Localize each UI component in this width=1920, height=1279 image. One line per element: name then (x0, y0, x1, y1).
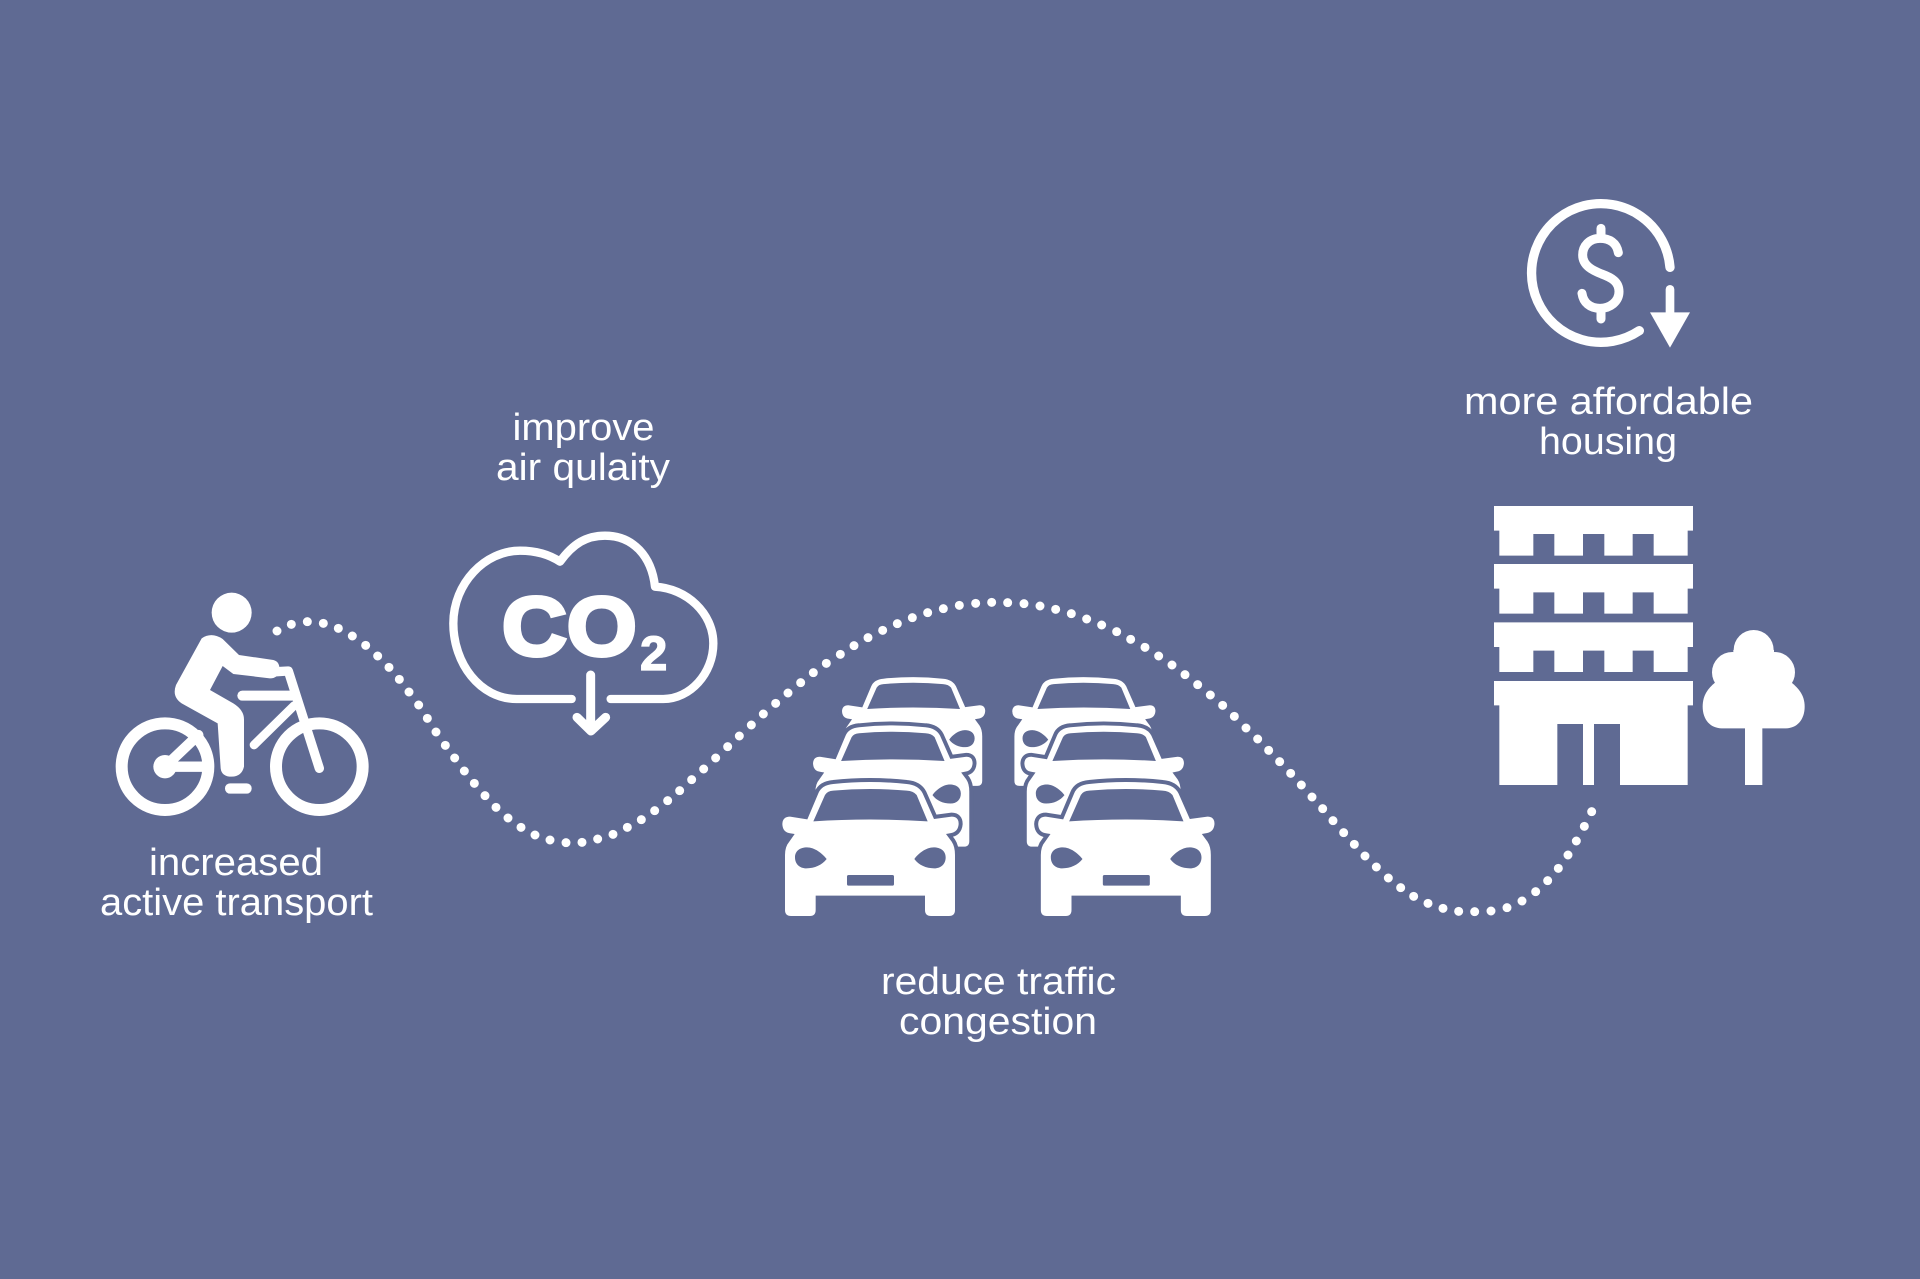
label: more affordable housing: housing (1539, 421, 1677, 463)
building floor 1 (1494, 506, 1693, 556)
car: left column rear (842, 677, 985, 786)
label: improve air qulaity: improve (512, 407, 654, 449)
icon: CO2 cloud with down arrow: 2 (640, 627, 667, 681)
label: increased active transport: active transport (100, 882, 373, 924)
label: improve air qulaity: air qulaity (496, 447, 670, 489)
label: more affordable housing: more affordable (1464, 381, 1753, 423)
car: right column rear (1012, 677, 1155, 786)
building floor 2 (1494, 564, 1693, 614)
icon: CO2 cloud with down arrow: CO (502, 580, 637, 673)
car: left column front (782, 782, 959, 916)
label: reduce traffic congestion (881, 961, 1116, 1043)
car: right column middle (1024, 725, 1184, 847)
building floor 3 (1494, 622, 1693, 672)
label: increased active transport: increased (149, 842, 323, 884)
icon: CO2 cloud with down arrow (453, 536, 713, 731)
label: reduce traffic congestion: reduce traffic (881, 961, 1116, 1003)
icon: dollar with falling arrow (1532, 204, 1690, 348)
label: reduce traffic congestion: congestion (899, 1001, 1097, 1043)
icon: traffic congestion cars (782, 677, 1214, 916)
icon: apartment building (1494, 506, 1693, 785)
building ground floor with door (1494, 681, 1693, 785)
label: more affordable housing (1464, 381, 1753, 463)
label: improve air qulaity (496, 407, 670, 489)
dotted journey path (277, 602, 1592, 912)
label: increased active transport (100, 842, 373, 924)
car: right column front (1038, 782, 1214, 916)
icon: tree (1703, 630, 1805, 785)
car: left column middle (813, 725, 973, 847)
icon: cyclist on bicycle (122, 593, 363, 810)
